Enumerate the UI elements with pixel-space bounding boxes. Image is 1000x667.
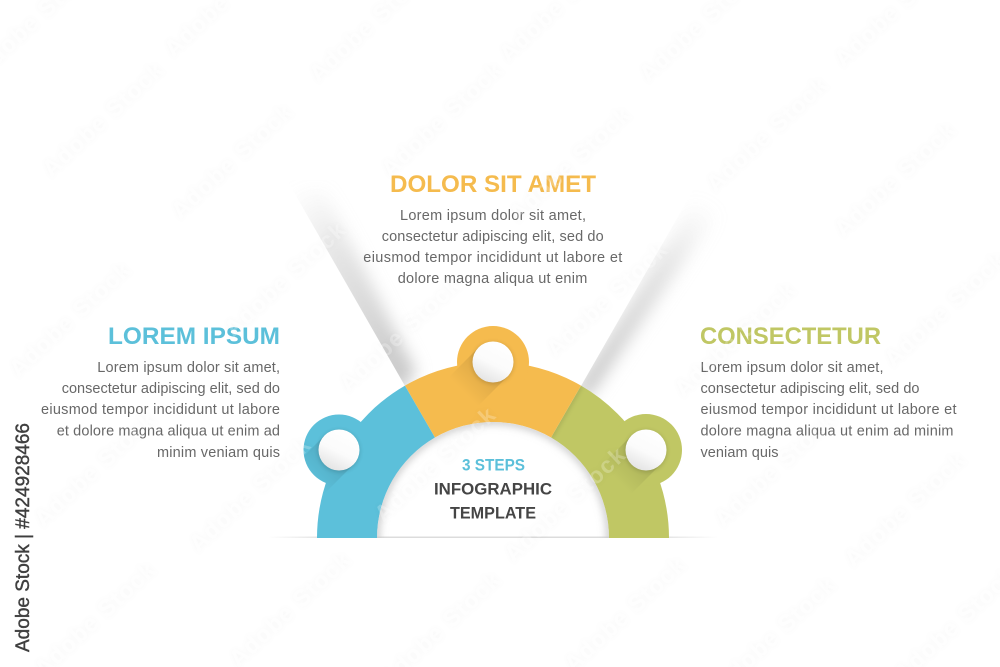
text block: dolor sit amet: eiusmod tempor incididunt ut labore et (363, 250, 622, 266)
watermark: repeated stock marks: Adobe Stock (701, 72, 832, 197)
icon: green knob circle (625, 430, 667, 472)
center half circle inner shadow (377, 422, 609, 538)
watermark: repeated stock marks: Adobe Stock (376, 57, 507, 182)
right wedge shadow (581, 224, 697, 396)
segment: orange step (405, 326, 581, 438)
center text: TEMPLATE (450, 504, 536, 522)
text block: consectetur: Lorem ipsum dolor sit amet, (700, 360, 884, 376)
watermark: repeated stock marks: Adobe Stock (334, 272, 465, 397)
text block: consectetur: veniam quis (700, 445, 778, 461)
text block: dolor sit amet: consectetur adipiscing elit, sed do (382, 229, 604, 245)
watermark: repeated stock marks: Adobe Stock (166, 99, 297, 224)
watermark: repeated stock marks: Adobe Stock (219, 217, 350, 342)
infographic canvas (14, 175, 956, 652)
text block: lorem ipsum: Lorem ipsum dolor sit amet, (97, 360, 280, 376)
watermark: repeated stock marks: Adobe Stock (829, 117, 960, 242)
icon: orange knob circle (472, 342, 514, 384)
watermark: repeated stock marks: Adobe Stock (184, 432, 315, 557)
heading: consectetur: CONSECTETUR (700, 323, 881, 350)
text block: dolor sit amet: Lorem ipsum dolor sit amet, (400, 208, 586, 224)
text block: consectetur: eiusmod tempor incididunt ut labore et (700, 402, 956, 418)
text block: dolor sit amet (363, 208, 622, 287)
watermark: repeated stock marks: Adobe Stock (4, 257, 135, 382)
center text: 3 STEPS (462, 456, 525, 474)
watermark: repeated stock marks: Adobe Stock (499, 442, 630, 567)
text block: lorem ipsum: consectetur adipiscing elit, sed do (62, 381, 280, 397)
left wedge shadow (307, 206, 420, 386)
center text (434, 456, 552, 522)
heading: lorem ipsum: LOREM IPSUM (108, 323, 280, 350)
baseline shadow (268, 536, 718, 538)
watermark: repeated stock marks: Adobe Stock (541, 237, 672, 362)
heading: dolor sit amet: DOLOR SIT AMET (390, 171, 596, 198)
watermark: repeated stock marks: Adobe Stock (669, 277, 800, 402)
text block: lorem ipsum: minim veniam quis (157, 445, 280, 461)
text block: consectetur: consectetur adipiscing elit, sed do (700, 381, 920, 397)
text block: lorem ipsum: eiusmod tempor incididunt ut labore (41, 402, 280, 418)
watermark: repeated stock marks: Adobe Stock (369, 402, 500, 527)
center text: INFOGRAPHIC (434, 480, 552, 498)
segment: green step (551, 386, 682, 538)
watermark: repeated stock marks: Adobe Stock (37, 57, 168, 182)
text block: lorem ipsum (41, 360, 280, 461)
text block: lorem ipsum: et dolore magna aliqua ut enim ad (57, 424, 280, 440)
side credit text: Adobe Stock | #424928466 (13, 423, 34, 652)
segment: blue step (295, 386, 435, 538)
text block: consectetur (700, 360, 956, 461)
watermark: repeated stock marks: Adobe Stock (29, 407, 160, 532)
watermark: repeated stock marks: Adobe Stock (839, 447, 970, 572)
text block: consectetur: dolore magna aliqua ut enim ad minim (700, 424, 954, 440)
watermark: repeated stock marks: Adobe Stock (709, 407, 840, 532)
text block: dolor sit amet: dolore magna aliqua ut enim (398, 271, 587, 287)
icon: blue knob circle (318, 430, 360, 472)
panel: half ring diagram (295, 326, 682, 538)
watermark: repeated stock marks: Adobe Stock (504, 102, 635, 227)
